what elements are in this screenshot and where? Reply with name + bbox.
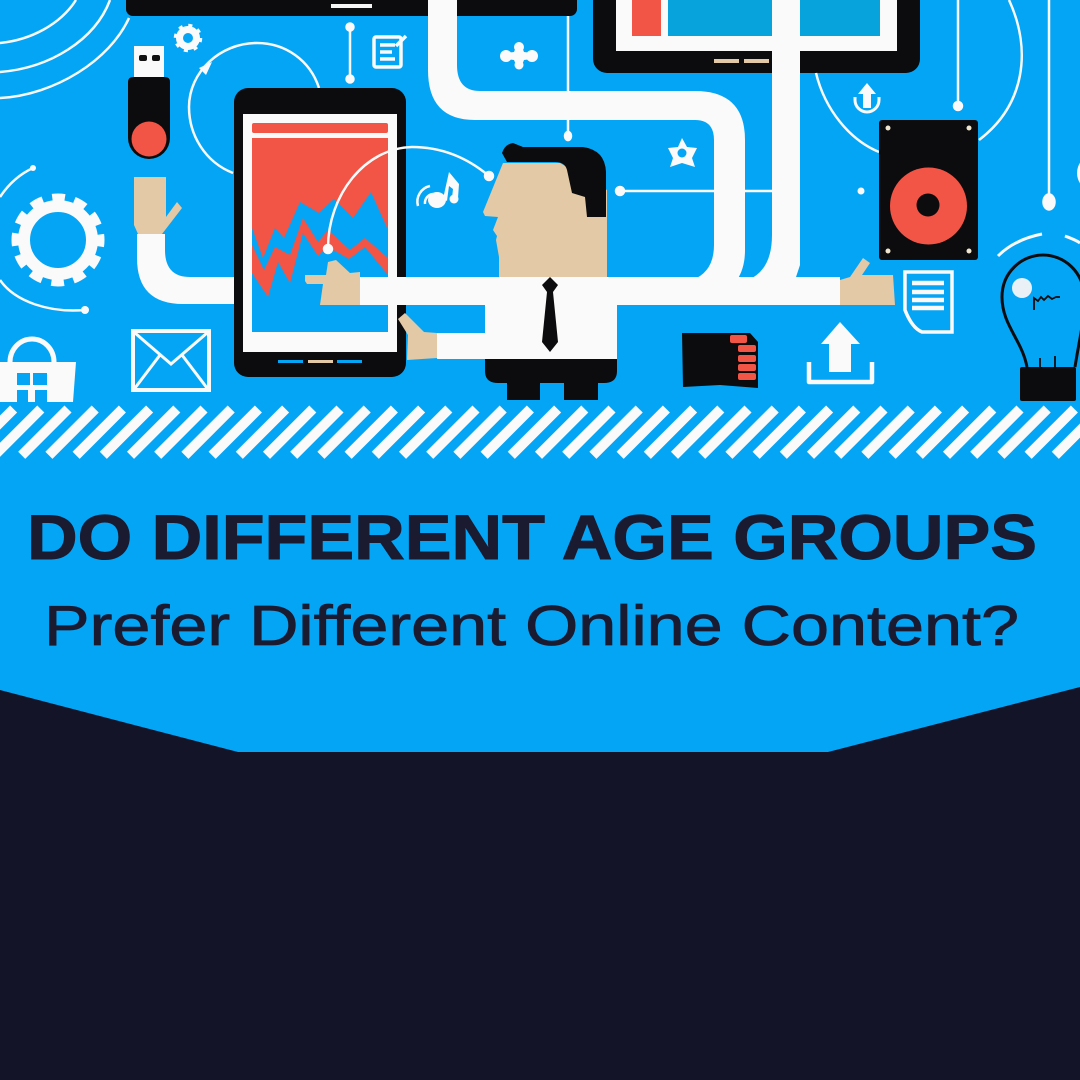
icon: arrows over bulb and right edge shape: [998, 156, 1080, 256]
icon: connector cluster: [500, 42, 538, 70]
title: DO DIFFERENT AGE GROUPS: [27, 503, 1037, 573]
chart: red area: [252, 138, 388, 258]
white pipe sleeve from top: [428, 0, 745, 280]
icon: document with pencil: [374, 36, 406, 67]
man: shirt and arms: [360, 277, 840, 359]
icon: small gear: [176, 26, 200, 50]
icon: large gear with arrows: [0, 165, 100, 314]
icon: USB drive: [128, 46, 170, 159]
icon: light bulb: [1002, 255, 1080, 401]
man: necktie: [542, 277, 558, 352]
icon: shopping bag: [0, 339, 76, 402]
icon: upload arrow: [809, 322, 872, 382]
circular arrow around tablet: [189, 43, 319, 173]
character: man with shirt and tie: [360, 143, 840, 400]
thin connector lines: [346, 0, 1054, 210]
man: hair: [502, 143, 606, 217]
infographic cover: [0, 0, 1080, 752]
icon: left raised hand: [134, 177, 182, 234]
white pipe sleeve vertical: [748, 0, 800, 280]
icon: music note: [417, 172, 459, 208]
hand: pointing at tablet: [305, 260, 360, 305]
icon: microphone upload: [855, 83, 879, 112]
icon: memory card: [682, 333, 758, 388]
icon: star: [668, 138, 697, 167]
arc over tablet to head: [324, 147, 493, 253]
man: trousers and feet: [485, 359, 617, 400]
hand: right open hand: [840, 258, 895, 305]
subtitle: Prefer Different Online Content?: [44, 594, 1019, 657]
concentric arcs top left: [0, 0, 129, 98]
icon: envelope: [133, 331, 209, 390]
hand: holding tablet: [398, 313, 437, 360]
chart: red zigzag band: [252, 218, 388, 297]
icon: speaker: [858, 120, 978, 260]
man: face and neck: [483, 163, 607, 278]
icon: document page: [905, 272, 952, 332]
dark bottom panel: [0, 687, 1080, 1080]
top-right tablet: [593, 0, 920, 73]
hatched stripe band: [0, 409, 1080, 455]
central tablet with chart: [234, 88, 406, 377]
top-left laptop base: [126, 0, 577, 16]
white pipe sleeve left: [137, 234, 240, 304]
